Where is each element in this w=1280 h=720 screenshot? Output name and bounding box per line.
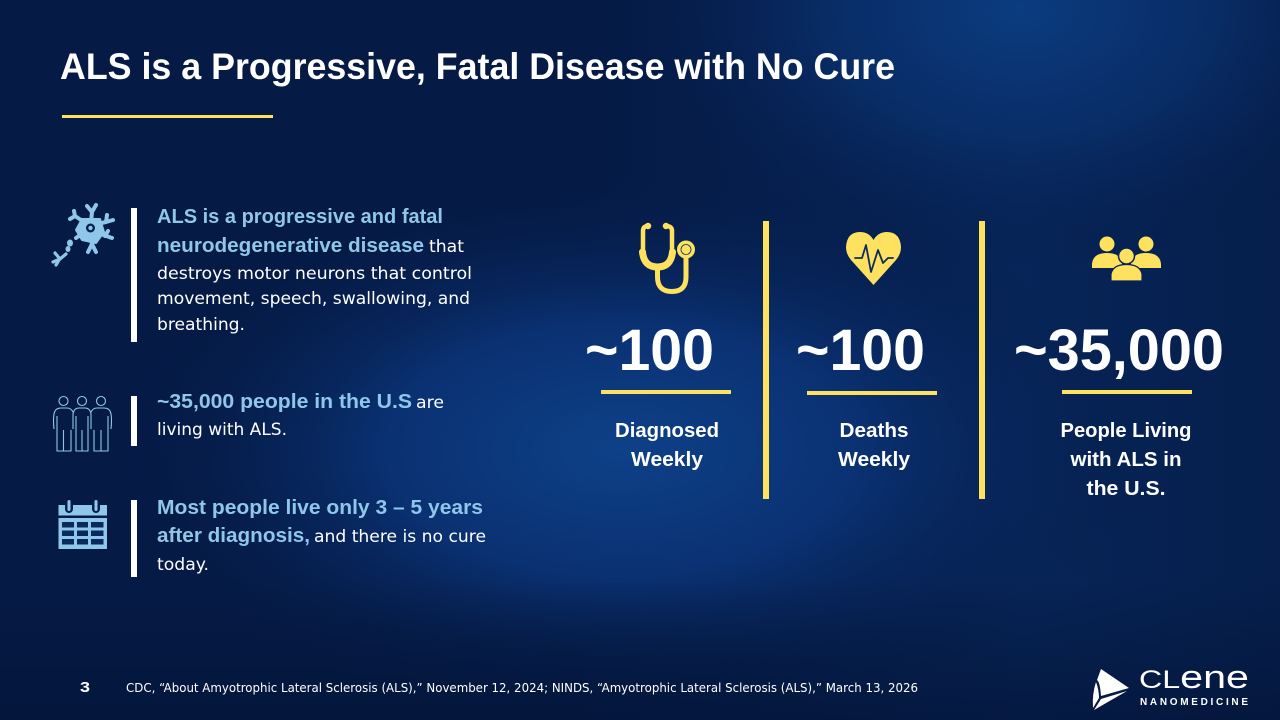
underline	[601, 390, 731, 394]
label: Diagnosed	[615, 419, 719, 442]
logo: Clene Nanomedicine	[1093, 659, 1249, 710]
text block: breathing.	[157, 315, 245, 334]
text block: Most people live only 3 – 5 years	[157, 497, 483, 519]
text block: destroys motor neurons that control	[157, 264, 472, 283]
number: ~100	[585, 318, 714, 383]
title underline	[62, 115, 273, 118]
text block: movement, speech, swallowing, and	[157, 289, 470, 308]
tagline: NANOMEDICINE	[1140, 697, 1248, 708]
text block: neurodegenerative disease	[157, 235, 424, 257]
label	[838, 419, 911, 471]
icon: neuron	[53, 205, 113, 265]
text block: today.	[157, 555, 209, 574]
divider	[763, 221, 769, 499]
icon: calendar	[58, 500, 107, 549]
page number: 3	[80, 680, 90, 696]
wordmark: CL ene	[1139, 659, 1249, 695]
number: ~35,000	[1014, 318, 1224, 383]
divider bar	[131, 208, 137, 342]
text block	[157, 206, 472, 334]
text block: that	[429, 237, 465, 256]
panel: people with ALS	[54, 391, 444, 451]
text block: and there is no cure	[314, 527, 486, 546]
label: People Living	[1060, 419, 1192, 442]
label	[615, 419, 719, 471]
icon: group of people	[1092, 236, 1161, 281]
text block: living with ALS.	[157, 420, 287, 439]
icon: logo mark	[1093, 669, 1129, 710]
divider bar	[131, 500, 137, 577]
stat: deaths weekly	[796, 232, 937, 471]
label: the U.S.	[1086, 477, 1166, 500]
number: ~100	[796, 318, 925, 383]
text block: after diagnosis,	[157, 525, 310, 547]
label: Deaths	[840, 419, 908, 442]
footnote: CDC, “About Amyotrophic Lateral Sclerosis (ALS),” November 12, 2024; NINDS, “Amyotrophic Lateral Sclerosis (ALS),” March 13, 2026	[126, 681, 918, 695]
panel: disease description	[53, 205, 472, 342]
label: Weekly	[631, 448, 704, 471]
icon: stethoscope	[642, 224, 695, 292]
underline	[1062, 390, 1192, 394]
text block: ~35,000 people in the U.S	[157, 391, 412, 413]
title: ALS is a Progressive, Fatal Disease with No Cure	[60, 46, 895, 87]
label: with ALS in	[1069, 448, 1182, 471]
label	[1060, 419, 1192, 500]
label: Weekly	[838, 448, 911, 471]
icon: three people outline	[54, 396, 112, 451]
underline	[807, 391, 937, 395]
text block	[157, 497, 486, 574]
panel: survival	[58, 497, 486, 577]
text block: ALS is a progressive and fatal	[157, 206, 443, 228]
divider bar	[131, 396, 137, 446]
stat: diagnosed weekly	[585, 224, 731, 471]
text block	[157, 391, 444, 439]
divider	[979, 221, 985, 499]
text block: are	[416, 393, 444, 412]
icon: heart with pulse	[846, 232, 901, 285]
stat: people living with ALS	[1014, 236, 1224, 500]
